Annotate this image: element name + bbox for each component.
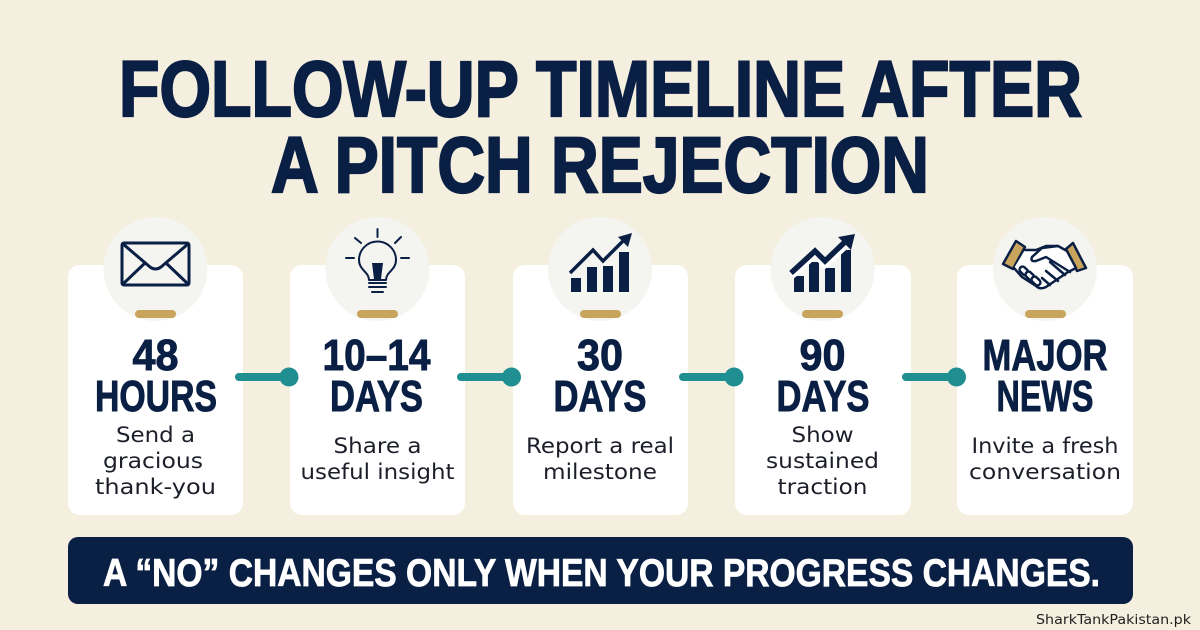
text: show sustained traction (766, 423, 879, 499)
icon: envelope (122, 243, 189, 285)
text: invite a fresh conversation: conversation (969, 460, 1121, 484)
panel: 10-14 days (290, 217, 465, 515)
text: report a real milestone (526, 434, 674, 484)
text: report a real milestone: milestone (543, 460, 657, 484)
heading: 30 days: 30 (577, 331, 623, 380)
heading: 90 days: DAYS (776, 372, 870, 421)
text: invite a fresh conversation: Invite a fresh (972, 434, 1118, 458)
text: report a real milestone: Report a real (526, 434, 674, 458)
arrow: connector 1 (235, 368, 298, 386)
icon: rising bars (791, 234, 855, 292)
text: share a useful insight (300, 434, 454, 484)
callout: closing banner (68, 537, 1133, 604)
heading: major news: MAJOR (982, 331, 1108, 380)
text: share a useful insight: useful insight (300, 460, 454, 484)
heading: major news (982, 331, 1108, 421)
arrow: connector 3 (679, 368, 744, 386)
icon: growth chart (570, 233, 632, 292)
text: send a gracious thank-you: thank-you (95, 475, 216, 499)
heading: 10-14 days: 10–14 (322, 331, 431, 380)
text: share a useful insight: Share a (334, 434, 422, 458)
heading: 10-14 days: DAYS (330, 372, 423, 421)
text: send a gracious thank-you: gracious (103, 449, 203, 473)
heading: 48 hours: HOURS (95, 372, 217, 421)
arrow: connector 4 (902, 368, 966, 386)
text: show sustained traction: Show (792, 423, 854, 447)
panel: 48 hours (68, 217, 243, 515)
heading: 48 hours (95, 331, 217, 421)
heading: 48 hours: 48 (132, 331, 178, 380)
watermark: SharkTankPakistan.pk (1036, 612, 1191, 628)
heading: 10-14 days (322, 331, 431, 421)
panel: 30 days (513, 217, 688, 515)
panel: 90 days (735, 217, 911, 515)
heading: major news: NEWS (996, 372, 1094, 421)
text: send a gracious thank-you (95, 423, 216, 499)
text: send a gracious thank-you: Send a (116, 423, 195, 447)
heading: 30 days: DAYS (554, 372, 646, 421)
text: show sustained traction: traction (778, 475, 868, 499)
heading: 90 days (776, 331, 870, 421)
arrow: connector 2 (457, 368, 521, 386)
icon: handshake (1003, 241, 1086, 288)
icon: light bulb (346, 229, 409, 292)
heading: 30 days (554, 331, 646, 421)
title (119, 44, 1082, 209)
heading: 90 days: 90 (800, 331, 846, 380)
text: show sustained traction: sustained (766, 449, 879, 473)
panel: major news (957, 217, 1133, 515)
title: A PITCH REJECTION (271, 120, 929, 209)
text: invite a fresh conversation (969, 434, 1121, 484)
